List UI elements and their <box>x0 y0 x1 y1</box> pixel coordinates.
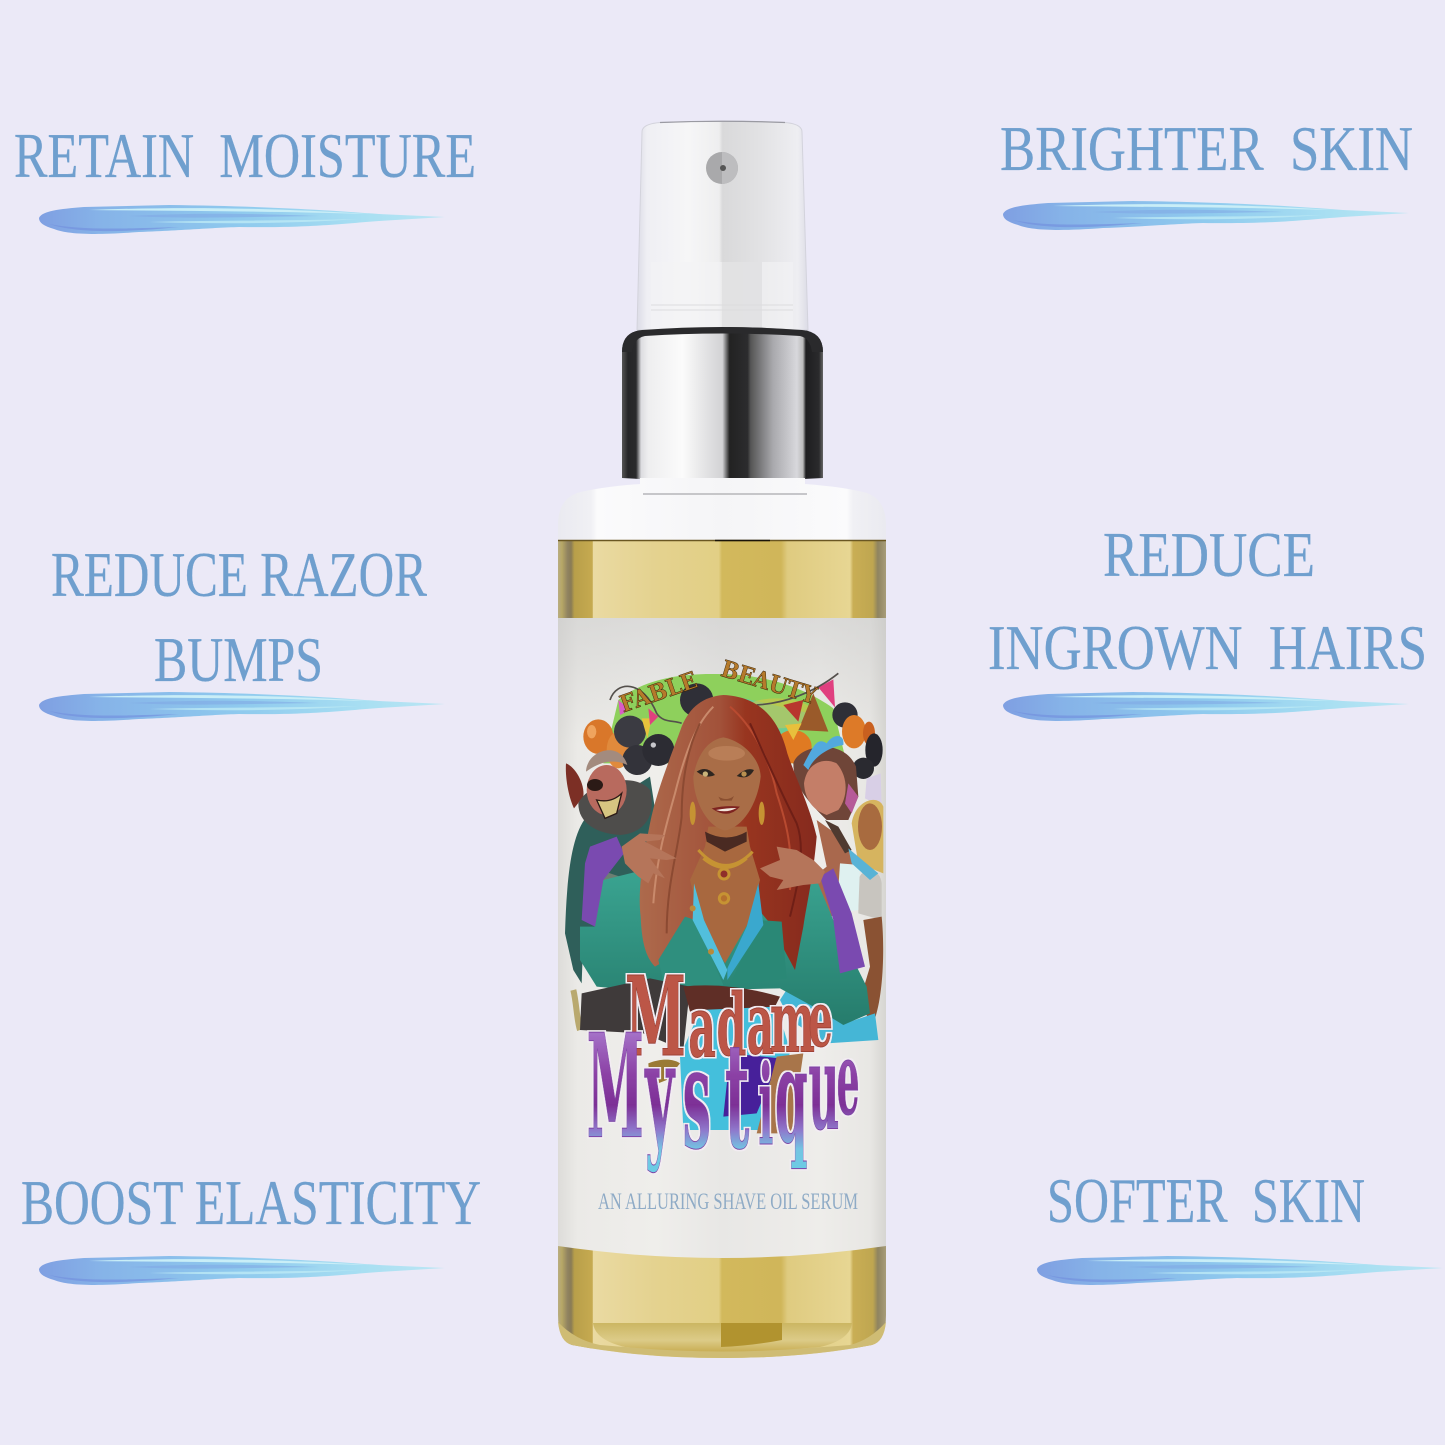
hair strands <box>653 707 801 933</box>
bottle shoulder <box>558 478 886 545</box>
product name: Mystique: y <box>644 1010 676 1175</box>
heading: BUMPS <box>154 624 323 695</box>
heading <box>51 539 427 695</box>
clear spray cap <box>637 121 808 330</box>
product name: Mystique: t <box>725 1010 749 1182</box>
product name: Mystique: q <box>775 1021 808 1174</box>
metal collar <box>622 327 823 481</box>
product name: Madame: m <box>770 972 815 1072</box>
main character face <box>693 737 761 831</box>
brush stroke <box>1003 692 1409 721</box>
brush stroke <box>39 1256 445 1285</box>
oil bottom section <box>558 1240 886 1358</box>
necklace <box>698 850 753 903</box>
heading: REDUCE <box>1103 519 1315 590</box>
belt <box>580 978 780 1050</box>
product name: Mystique: e <box>837 1019 860 1137</box>
bottle base <box>593 1323 852 1352</box>
heading: REDUCE RAZOR <box>51 539 427 610</box>
benefit: retain moisture <box>14 120 476 234</box>
product name: Mystique: M <box>587 1004 644 1171</box>
heading <box>988 519 1427 683</box>
brush stroke <box>39 692 445 721</box>
skirt <box>648 1007 803 1133</box>
main character hair <box>640 695 817 970</box>
main character jacket <box>580 870 870 1025</box>
product name: Madame: a <box>688 977 716 1077</box>
benefit: softer skin <box>1037 1165 1443 1285</box>
gloves <box>582 837 865 973</box>
benefit: reduce razor bumps <box>39 539 445 721</box>
benefit: boost elasticity <box>21 1167 481 1285</box>
brush stroke <box>1003 201 1409 230</box>
benefit: reduce ingrown hairs <box>988 519 1427 721</box>
choker <box>705 832 747 852</box>
alice companion <box>780 736 878 1043</box>
face details <box>690 746 765 825</box>
label illustration <box>565 654 883 1182</box>
product name: Mystique: u <box>808 1017 839 1156</box>
product name: Madame: d <box>717 975 746 1075</box>
hands <box>622 833 825 890</box>
blonde companion <box>852 773 883 1027</box>
party background <box>583 673 883 779</box>
heading: BOOST ELASTICITY <box>21 1167 481 1238</box>
product name: Mystique: s <box>683 1016 711 1181</box>
product bottle <box>558 121 886 1358</box>
product subtitle: AN ALLURING SHAVE OIL SERUM <box>598 1189 858 1214</box>
pirate and parrot <box>565 750 663 1030</box>
spray nozzle <box>706 152 738 184</box>
benefit: brighter skin <box>1000 113 1413 230</box>
main character chest and neck <box>690 827 760 963</box>
main character jacket front <box>658 883 787 988</box>
FABLE BEAUTY logo text: FABLE <box>616 666 701 718</box>
product name <box>587 951 860 1182</box>
label <box>558 618 886 1258</box>
brush stroke <box>39 205 445 234</box>
heading: RETAIN MOISTURE <box>14 120 476 191</box>
product name: Madame: M <box>625 951 686 1082</box>
brush stroke <box>1037 1256 1443 1285</box>
FABLE BEAUTY logo text <box>616 654 820 718</box>
product name: Madame: a <box>747 974 774 1074</box>
product name: Mystique: i <box>758 1042 773 1171</box>
FABLE BEAUTY logo text: BEAUTY <box>718 654 820 710</box>
product name: Madame: e <box>808 975 833 1065</box>
oil top section <box>558 540 886 620</box>
